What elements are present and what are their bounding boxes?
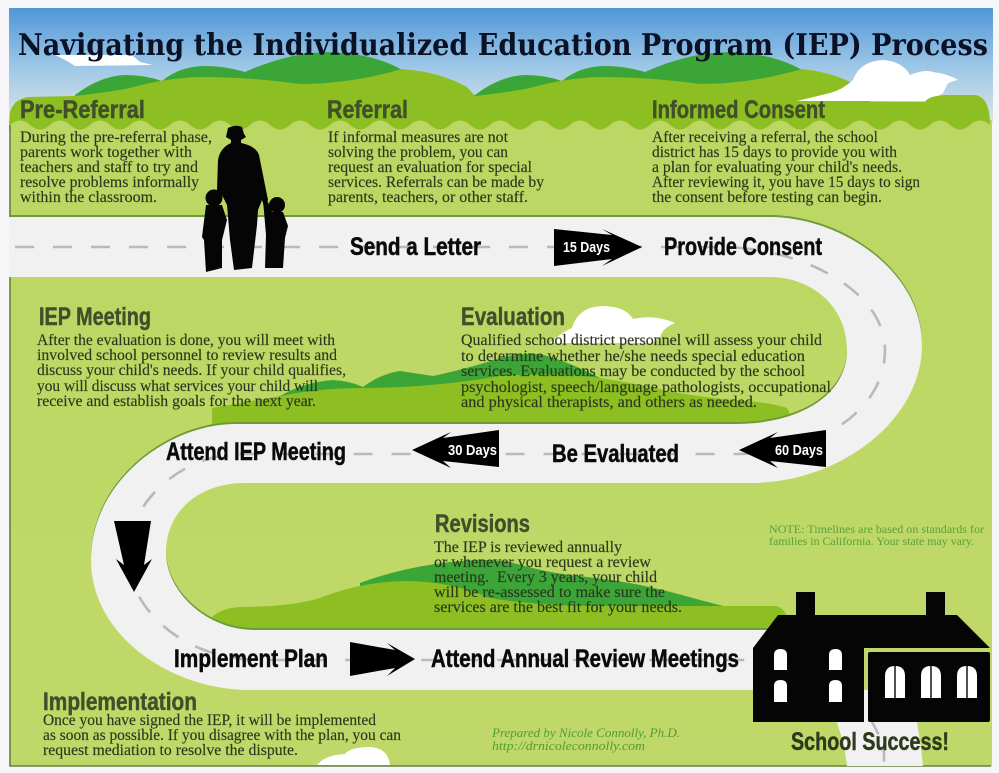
arrow: 15 days: 15 Days — [563, 239, 610, 256]
body text: receive and establish goals for the next year. — [37, 393, 316, 410]
body text: Qualified school district personnel will assess your child — [461, 332, 822, 349]
heading: IEP Meeting — [39, 303, 151, 331]
arrow: 30 days — [412, 430, 499, 468]
body text: resolve problems informally — [20, 174, 199, 191]
heading: Implementation — [43, 688, 197, 716]
step label: send a letter: Send a Letter — [350, 233, 481, 261]
body text: psychologist, speech/language pathologists, occupational — [461, 379, 831, 396]
body text — [461, 332, 831, 411]
panel: evaluation — [461, 303, 831, 411]
credit: author — [491, 725, 680, 753]
body text: teachers and staff to try and — [20, 159, 198, 176]
arrow: down — [114, 521, 152, 592]
panel: iep meeting — [37, 303, 346, 410]
body text: discuss your child's needs. If your child qualifies, — [37, 362, 346, 379]
heading: Pre-Referral — [20, 96, 145, 124]
heading: Revisions — [435, 510, 530, 538]
cloud: title left — [55, 55, 153, 66]
arrow: 60 days: 60 Days — [775, 442, 823, 459]
credit: author: http://drnicoleconnolly.com — [492, 738, 645, 753]
body text — [37, 332, 346, 410]
hills: middle dark — [280, 354, 600, 400]
hills: middle light — [212, 374, 791, 426]
road — [9, 217, 922, 690]
body text: After the evaluation is done, you will meet with — [37, 332, 335, 349]
arrow: right — [350, 642, 415, 676]
body text: or whenever you request a review — [434, 554, 652, 571]
body text: will be re-assessed to make sure the — [434, 584, 665, 601]
arrow: 30 days: 30 Days — [448, 442, 497, 459]
body text: services are the best fit for your needs. — [434, 599, 682, 616]
front hills — [9, 69, 870, 130]
body text: a plan for evaluating your child's needs. — [652, 159, 902, 176]
cloud: evaluation — [550, 306, 675, 343]
body text: meeting. Every 3 years, your child — [434, 569, 657, 586]
body text: request mediation to resolve the dispute. — [43, 742, 298, 759]
body text: parents work together with — [20, 144, 192, 161]
bottom cloud — [317, 747, 390, 765]
caption: school success: School Success! — [791, 728, 949, 756]
note: timelines: families in California. Your state may vary. — [769, 534, 974, 548]
body text: services. Referrals can be made by — [328, 174, 544, 191]
icon: school building — [753, 592, 990, 722]
body text: parents, teachers, or other staff. — [328, 189, 528, 206]
step label: implement plan: Implement Plan — [174, 645, 328, 673]
step label: attend annual review meetings: Attend Annual Review Meetings — [431, 645, 739, 673]
road edge — [9, 215, 922, 688]
windows: main — [774, 649, 842, 702]
step label: attend iep meeting: Attend IEP Meeting — [166, 438, 346, 466]
road dash: school drive — [872, 722, 884, 762]
body text — [20, 129, 212, 206]
arrow: 60 days — [739, 430, 826, 468]
step label: provide consent: Provide Consent — [664, 233, 823, 261]
body text: Once you have signed the IEP, it will be implemented — [43, 712, 376, 729]
panel: informed consent — [652, 96, 920, 206]
body text: The IEP is reviewed annually — [434, 539, 622, 556]
panel: pre-referral — [20, 96, 212, 206]
heading: Referral — [327, 96, 408, 124]
body text: within the classroom. — [20, 189, 157, 206]
body text: During the pre-referral phase, — [20, 129, 212, 146]
body text — [652, 129, 920, 206]
arrow: 15 days — [554, 229, 642, 266]
cloud: top right — [797, 60, 958, 101]
icon: parent and children silhouette — [202, 126, 288, 272]
heading: Informed Consent — [652, 96, 826, 124]
body text: solving the problem, you can — [328, 144, 508, 161]
panel: implementation — [43, 688, 401, 759]
body text: and physical therapists, and others as needed. — [461, 394, 757, 411]
hills: bottom dark — [360, 560, 727, 612]
body text — [43, 712, 401, 759]
body text: as soon as possible. If you disagree with the plan, you can — [43, 727, 401, 744]
body text: request an evaluation for special — [328, 159, 532, 176]
body text: district has 15 days to provide you with — [652, 144, 897, 161]
note: timelines: NOTE: Timelines are based on standards for — [769, 522, 984, 536]
body text: services. Evaluations may be conducted by the school — [461, 363, 805, 380]
windows: annex — [885, 666, 977, 698]
body text: After receiving a referral, the school — [652, 129, 878, 146]
panel: revisions — [434, 510, 682, 616]
scalloped grass edge — [10, 120, 990, 140]
body text: the consent before testing can begin. — [652, 189, 882, 206]
note: timelines — [769, 522, 984, 548]
body text — [328, 129, 544, 206]
front hill: right shoulder — [790, 95, 990, 130]
chimneys — [796, 592, 945, 616]
road to school — [837, 690, 923, 766]
body text: involved school personnel to review results and — [37, 347, 337, 364]
window mullions — [895, 666, 967, 698]
hills: bottom light — [212, 581, 792, 632]
body text: After reviewing it, you have 15 days to sign — [652, 174, 920, 191]
sky — [9, 8, 993, 123]
panel: referral — [327, 96, 544, 206]
body text: you will discuss what services your child will — [37, 378, 318, 395]
main building — [753, 615, 990, 722]
road centre dashes — [15, 247, 885, 660]
step label: be evaluated: Be Evaluated — [552, 440, 679, 468]
annex — [868, 652, 990, 722]
heading: Evaluation — [461, 303, 565, 331]
body text: If informal measures are not — [328, 129, 509, 146]
body text — [434, 539, 682, 616]
body text: to determine whether he/she needs special education — [461, 348, 805, 365]
credit: author: Prepared by Nicole Connolly, Ph.D. — [491, 725, 680, 740]
back hills — [75, 52, 860, 100]
